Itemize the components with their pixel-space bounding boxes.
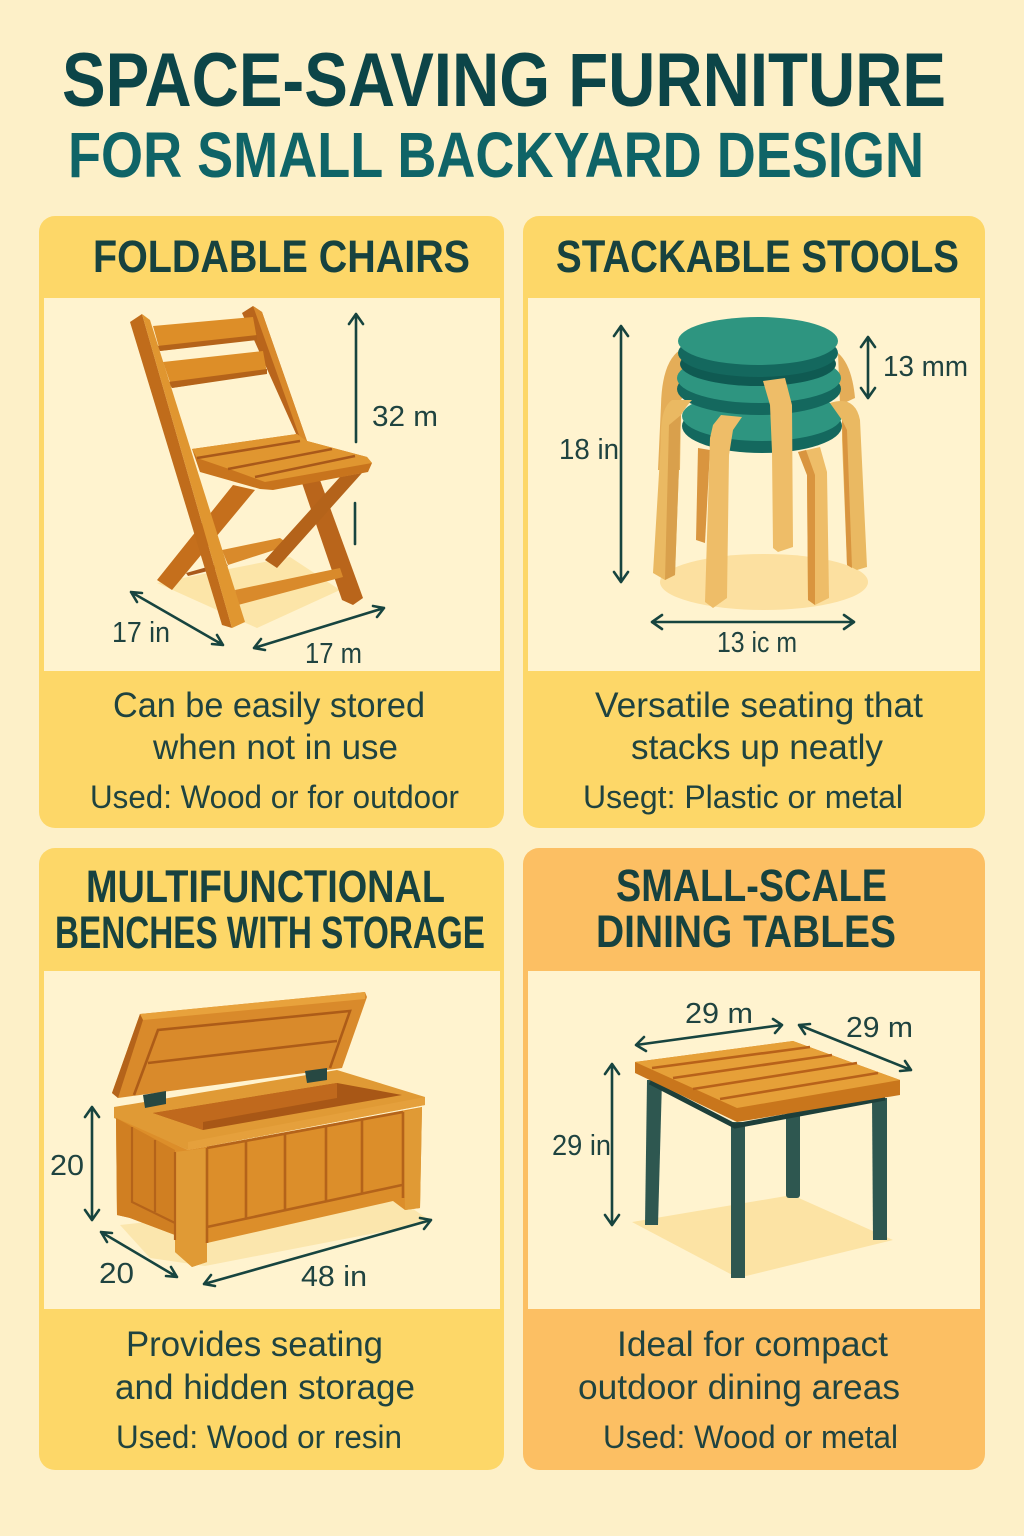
lid [112,992,367,1098]
description: stackable stools: stacks up neatly [631,728,883,767]
description: stackable stools: Usegt: Plastic or metal [583,779,903,815]
image area: stackable stools [528,298,980,671]
heading: small-scale dining tables: SMALL-SCALE [616,860,887,911]
heading: stackable stools: STACKABLE STOOLS [556,231,959,282]
dimensions: foldable chair: 32 m [372,401,438,433]
heading: multifunctional benches: MULTIFUNCTIONAL [86,861,445,912]
dimensions: foldable chair: 17 m [305,638,362,670]
dimensions: stackable stools: 13 mm [883,351,968,383]
image area: storage bench [44,971,500,1309]
illustration: dining table [632,1041,900,1278]
center leg [763,378,793,552]
front left leg [705,415,742,608]
dimensions: dining table [552,998,913,1225]
dimensions: dining table: 29 in [552,1130,611,1162]
description: foldable chairs: Can be easily stored [113,686,425,725]
description: dining tables: Used: Wood or metal [603,1419,898,1455]
hinges [143,1091,166,1108]
stacked seats [682,399,842,453]
description: foldable chairs: Used: Wood or for outdoor [90,779,459,815]
front face [116,1107,422,1267]
heading: foldable chairs: FOLDABLE CHAIRS [93,231,470,282]
heading: small-scale dining tables: DINING TABLES [596,906,896,957]
panel: stackable stools [523,216,985,828]
image area: foldable chair [44,298,500,671]
illustration: storage bench [112,992,432,1267]
description: foldable chairs: when not in use [152,728,398,767]
panel: multifunctional benches [39,848,504,1470]
front rail [130,314,232,628]
dimensions: stackable stools: 18 in [559,434,619,466]
heading: multifunctional benches [55,861,485,958]
dimensions: foldable chair [112,314,438,670]
description: benches: Used: Wood or resin [116,1419,402,1455]
description: dining tables: Ideal for compact [617,1325,888,1364]
panel: foldable chairs [39,216,504,828]
panel: small-scale dining tables [523,848,985,1470]
description: dining tables: outdoor dining areas [578,1368,900,1407]
right leg [830,401,867,570]
image area: dining table [528,971,980,1309]
description: stackable stools: Versatile seating that [595,686,923,725]
description: foldable chairs [90,686,459,815]
heading: multifunctional benches: BENCHES WITH STORAGE [55,907,485,958]
description: dining tables [578,1325,900,1455]
front right leg [798,447,829,605]
back slats [153,317,257,351]
cross legs [157,485,255,590]
dimensions: storage bench [50,1107,431,1293]
description: benches: Provides seating [126,1325,383,1364]
illustration: stackable stools [653,317,868,610]
box interior and rim [114,1070,425,1150]
dimensions: dining table: 29 m [685,998,753,1030]
back rail right [242,306,307,441]
dimensions: foldable chair: 17 in [112,617,170,649]
seat [192,434,372,490]
back legs [658,350,693,470]
left leg [653,400,692,580]
description: benches [115,1325,415,1455]
description: stackable stools [583,686,923,815]
title [62,38,946,191]
heading: small-scale dining tables [596,860,896,957]
dimensions: storage bench: 20 [99,1258,134,1290]
dimensions: dining table: 29 m [846,1012,913,1044]
dimensions: storage bench: 20 [50,1150,84,1182]
dimensions: stackable stools [559,326,968,659]
dimensions: storage bench: 48 in [301,1261,367,1293]
illustration: foldable chair [130,306,372,628]
dimensions: stackable stools: 13 ic m [717,627,797,659]
description: benches: and hidden storage [115,1368,415,1407]
